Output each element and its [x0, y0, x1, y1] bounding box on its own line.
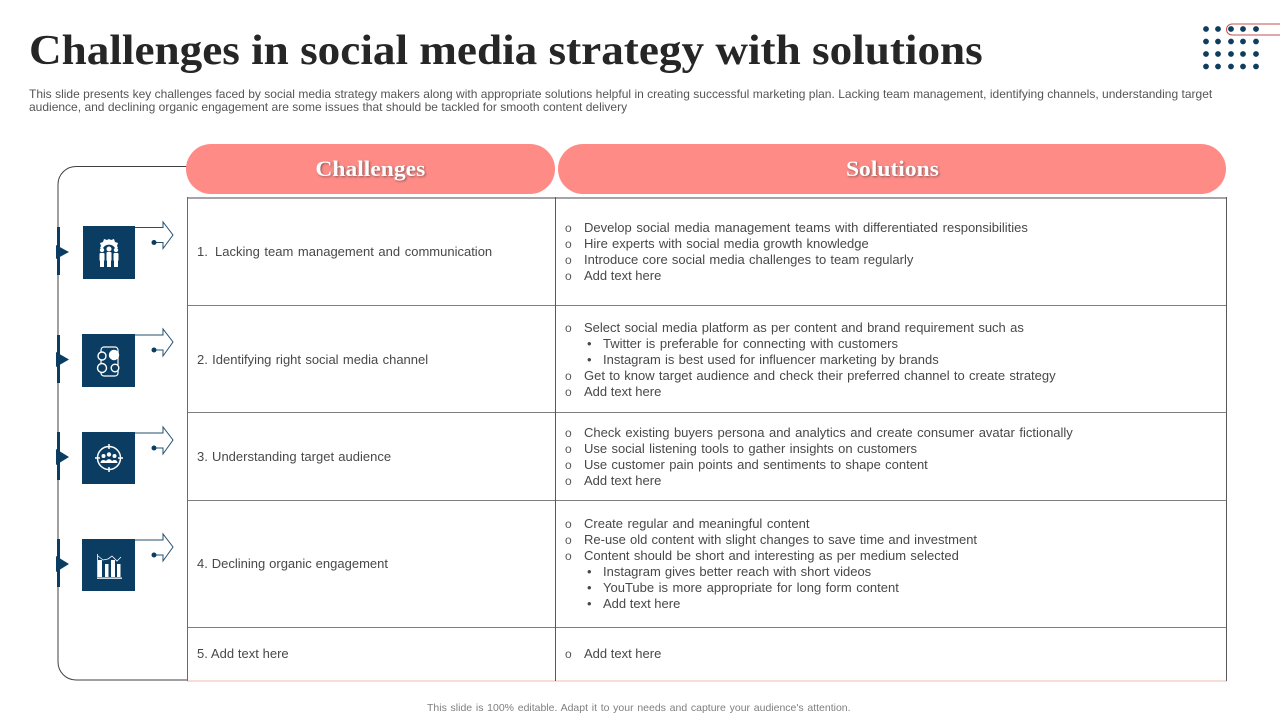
row 5: solutions: Add text here [584, 646, 661, 661]
header: Solutions [558, 144, 1226, 194]
row 3: challenge: 3. Understanding target audience [197, 449, 391, 464]
icon: team gear [83, 226, 135, 279]
table [187, 197, 1227, 682]
row 4: solutions: Instagram gives better reach with short videos [603, 564, 871, 579]
row 1: solutions: Develop social media management teams with differentiated responsibilities [584, 220, 1028, 235]
row 1: solutions: o [565, 269, 572, 283]
row 1: solutions: o [565, 221, 572, 235]
row 5: solutions: o [565, 647, 572, 661]
row 1: solutions: Add text here [584, 268, 661, 283]
row 4: solutions [565, 516, 977, 611]
row 2: solutions: o [565, 385, 572, 399]
row 4: solutions: • [587, 580, 592, 595]
row 4: solutions: YouTube is more appropriate for long form content [603, 580, 899, 595]
description text [29, 87, 1212, 114]
title: Challenges in social media strategy with solutions [29, 28, 983, 74]
row 2: solutions: Select social media platform as per content and brand requirement such as [584, 320, 1024, 335]
row 4: solutions: o [565, 533, 572, 547]
row 3: solutions: o [565, 458, 572, 472]
header: Challenges: Challenges [316, 156, 425, 181]
row 2: solutions: • [587, 336, 592, 351]
description text: audience, and declining organic engagement are some issues that should be tackled for smooth content delivery [29, 100, 627, 114]
row 1: solutions [565, 220, 1028, 283]
description text: This slide presents key challenges faced by social media strategy makers along with appropriate solutions helpful in creating successful marketing plan. Lacking team management, identifying channels, understanding target [29, 87, 1212, 101]
row 3: solutions: Check existing buyers persona and analytics and create consumer avatar fictionally [584, 425, 1073, 440]
row 3: solutions: o [565, 442, 572, 456]
row 2: challenge: 2. Identifying right social media channel [197, 352, 428, 367]
row 2: solutions: Add text here [584, 384, 661, 399]
row 1: solutions: o [565, 237, 572, 251]
row 2: solutions: • [587, 352, 592, 367]
row 4: solutions: • [587, 564, 592, 579]
row 4: solutions: Content should be short and interesting as per medium selected [584, 548, 959, 563]
icon: social media phone [82, 334, 135, 387]
row 3: solutions: Use social listening tools to gather insights on customers [584, 441, 917, 456]
row 1: solutions: Hire experts with social media growth knowledge [584, 236, 869, 251]
row 2: solutions: o [565, 321, 572, 335]
icon: declining bar chart [82, 539, 135, 591]
row 3: solutions [565, 425, 1073, 488]
row 4: challenge: 4. Declining organic engagement [197, 556, 388, 571]
row 4: solutions: o [565, 549, 572, 563]
footer note: This slide is 100% editable. Adapt it to your needs and capture your audience's attention. [427, 702, 851, 714]
row 3: solutions: o [565, 426, 572, 440]
icon: target audience [82, 432, 135, 484]
row 2: solutions [565, 320, 1056, 399]
row 2: solutions: Instagram is best used for influencer marketing by brands [603, 352, 939, 367]
decorative dot grid [1203, 24, 1280, 70]
row 4: solutions: • [587, 596, 592, 611]
row 3: solutions: Add text here [584, 473, 661, 488]
left connector and arrows [56, 166, 187, 680]
row 3: solutions: Use customer pain points and sentiments to shape content [584, 457, 928, 472]
row 2: solutions: Get to know target audience and check their preferred channel to create strategy [584, 368, 1056, 383]
row 4: solutions: Re-use old content with slight changes to save time and investment [584, 532, 977, 547]
row 3: solutions: o [565, 474, 572, 488]
row 5: challenge: 5. Add text here [197, 646, 289, 661]
row 1: challenge: 1. [197, 244, 208, 259]
row 1: solutions: o [565, 253, 572, 267]
row 2: solutions: Twitter is preferable for connecting with customers [603, 336, 898, 351]
row 2: solutions: o [565, 369, 572, 383]
row 1: solutions: Introduce core social media challenges to team regularly [584, 252, 913, 267]
row 4: solutions: o [565, 517, 572, 531]
header: Solutions: Solutions [846, 156, 938, 181]
row 4: solutions: Create regular and meaningful content [584, 516, 809, 531]
row 1: challenge: Lacking team management and communication [215, 244, 492, 259]
header: Challenges [186, 144, 555, 194]
row 4: solutions: Add text here [603, 596, 680, 611]
